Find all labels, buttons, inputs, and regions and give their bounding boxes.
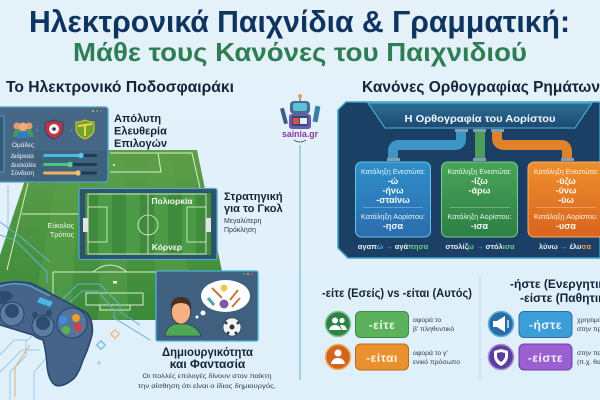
examples: στολίζω → στόλισα (445, 242, 515, 251)
rule card: blue: -σταίνω (376, 195, 410, 205)
panel: tactical pitch: Πολιορκία (151, 196, 193, 206)
text: creativity caption: Οι πολλές επιλογές δίνουν στον παίκτη (142, 372, 272, 380)
text: creativity caption (138, 345, 276, 390)
panel: creativity (156, 271, 258, 341)
label: easy way: Εύκολος (48, 222, 75, 230)
football pitch (0, 150, 232, 320)
title: Μάθε τους Κανόνες του Παιχνιδιού (73, 37, 527, 67)
rule card: green: -ισα (471, 221, 489, 231)
rule row: -ήστε: -ήστε (529, 318, 562, 332)
panel: tactical pitch: Κόρνερ (152, 242, 182, 252)
icon: ball (223, 318, 241, 336)
connector pipes (393, 130, 567, 160)
text: creativity caption: την αίσθηση ότι είναι ο ίδιος δημιουργός. (138, 382, 276, 390)
callout: freedom of choice: Επιλογών (114, 138, 167, 150)
slider: duration: Διάρκεια (11, 153, 34, 160)
rule card: blue (356, 162, 430, 237)
title: Ηλεκτρονικά Παιχνίδια & Γραμματική: (29, 4, 570, 39)
rule row: -είτε: β' πληθυντικό (413, 325, 454, 333)
rule card: orange: -υσα (556, 221, 576, 231)
icon: green team shield (76, 120, 94, 139)
rule row: -είστε (488, 344, 600, 370)
logo: robot: sainia.gr (282, 129, 318, 139)
rule row: -είται: ενικό πρόσωπο (413, 358, 460, 366)
callout: freedom of choice: Απόλυτη (114, 113, 161, 125)
rule card: green: -ίζω (471, 176, 488, 186)
rule card: green: Κατάληξη Αορίστου: (448, 213, 512, 221)
logo: robot (280, 94, 320, 142)
section: -είτε vs -είται (322, 286, 472, 370)
callout: strategy for goal: Πρόκληση (224, 226, 256, 234)
panel: team selection: ‹ (36, 128, 38, 134)
game controller (0, 282, 92, 386)
examples (358, 242, 591, 251)
panel: aorist spelling rules (338, 102, 600, 258)
rule row: -είτε: αφορά το (413, 316, 441, 324)
rule row: -είται: αφορά το γ' (413, 349, 448, 357)
rule row: -είται (326, 344, 460, 370)
panel: tactical pitch (79, 188, 217, 260)
panel header: Η Ορθογραφία του Αορίστου (404, 114, 556, 125)
rule card: orange: -ύνω (556, 186, 577, 196)
icon: red team shield (45, 120, 63, 139)
heading: left section: Το Ηλεκτρονικό Ποδοσφαιράκι (6, 79, 234, 96)
circuit decoration (0, 145, 480, 400)
rule card: green: Κατάληξη Ενεστώτα: (448, 168, 512, 176)
icon: players (13, 122, 33, 138)
rule card: orange: Κατάληξη Ενεστώτα: (534, 168, 598, 176)
rule row: -είτε (326, 312, 454, 338)
label: easy way: Τρόπος (50, 231, 75, 239)
slider: difficulty: Δυσκολία (11, 163, 36, 169)
panel: team selection: Ομάδες (12, 141, 34, 149)
rule card: blue: Κατάληξη Ενεστώτα: (361, 168, 425, 176)
diamond decorations (97, 330, 119, 365)
examples: λύνω → έλυσα (539, 242, 591, 251)
rule card: blue: -ήνω (382, 186, 404, 196)
examples: αγαπώ → αγάπησα (358, 242, 429, 251)
title (29, 4, 570, 67)
rule row: -είται: -είται (366, 351, 398, 365)
callout: strategy for goal (224, 191, 283, 234)
rule row: -είστε: -είστε (528, 351, 563, 365)
rule card: green (442, 162, 518, 237)
callout: freedom of choice: Ελευθερία (114, 126, 167, 138)
rule card: blue: Κατάληξη Αορίστου: (361, 213, 425, 221)
slider: connection: Σύνδεση (11, 171, 34, 177)
rule card: orange: -ύω (558, 195, 574, 205)
text: creativity caption: Δημιουργικότητα (162, 345, 254, 359)
panel: team selection: › (70, 128, 72, 134)
rule card: blue: -ησα (383, 221, 404, 231)
circuit lines over pitch (0, 222, 150, 340)
heading: right section: Κανόνες Ορθογραφίας Ρημάτων (362, 79, 600, 96)
section: -είτε vs -είται: -είτε (Εσείς) vs -είται (Αυτός) (322, 286, 472, 300)
callout: strategy for goal: Στρατηγική (224, 191, 283, 203)
rule card: orange: -ύζω (556, 176, 576, 186)
text: creativity caption: και Φαντασία (170, 357, 246, 371)
rule card: orange (528, 162, 600, 237)
rule card: blue: -ώ (388, 176, 399, 186)
section: -ήστε vs -είστε (488, 277, 600, 370)
icon: thought cloud (196, 280, 250, 318)
panel header (368, 103, 592, 128)
callout: strategy for goal: Μεγαλύτερη (224, 217, 262, 225)
panel: team selection (0, 107, 108, 182)
rule row: -είτε: -είτε (369, 318, 395, 332)
callout: strategy for goal: για το Γκολ (224, 203, 283, 215)
icon: player (165, 297, 201, 336)
rule card: green: -άρω (469, 186, 491, 196)
rule row: -ήστε (488, 312, 600, 338)
rule card: orange: Κατάληξη Αορίστου: (534, 213, 598, 221)
